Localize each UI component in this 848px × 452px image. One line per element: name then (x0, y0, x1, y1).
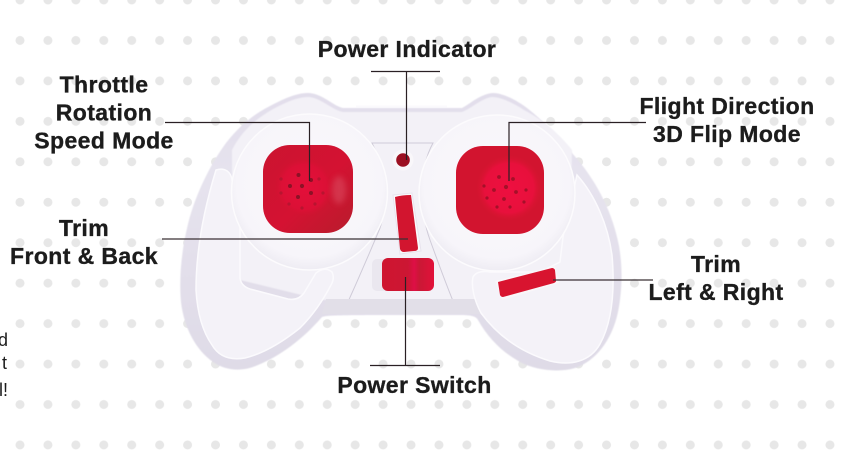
power switch (372, 258, 434, 291)
callout: trim left and right (553, 251, 784, 305)
callout: power switch: Power Switch (337, 372, 492, 398)
right stick dome (419, 115, 575, 271)
callout: trim front and back: Trim (59, 215, 109, 241)
callout: power switch (337, 277, 492, 398)
top edge ridge (356, 106, 447, 108)
controller (180, 93, 622, 370)
right grip (472, 175, 613, 363)
left stick dome (232, 114, 388, 270)
callout: flight direction: 3D Flip Mode (653, 121, 801, 147)
callout: trim front and back: Front & Back (10, 243, 158, 269)
left right trim button (495, 266, 559, 300)
centre panel (343, 143, 458, 313)
callout: throttle: Throttle (60, 72, 148, 98)
callout: flight direction (509, 93, 815, 181)
callout: trim left and right: Trim (691, 251, 741, 277)
upper body light area (232, 97, 572, 300)
callout: throttle (34, 72, 310, 181)
left grip (196, 169, 333, 359)
right stick cap (456, 146, 544, 234)
left stick cap (263, 145, 353, 233)
callout: trim left and right: Left & Right (648, 279, 784, 305)
power indicator LED (392, 150, 414, 170)
controller body (180, 93, 622, 370)
callout: power indicator: Power Indicator (318, 36, 496, 62)
bottom strip shade (322, 299, 480, 314)
clipped side text (0, 330, 8, 400)
front back trim button (393, 193, 421, 254)
callout: trim front and back (10, 215, 408, 269)
callout: throttle: Speed Mode (34, 128, 174, 154)
callout: flight direction: Flight Direction (639, 93, 815, 119)
callout: power indicator (318, 36, 496, 160)
clipped side text: t (2, 353, 7, 373)
callout: throttle: Rotation (56, 100, 152, 126)
